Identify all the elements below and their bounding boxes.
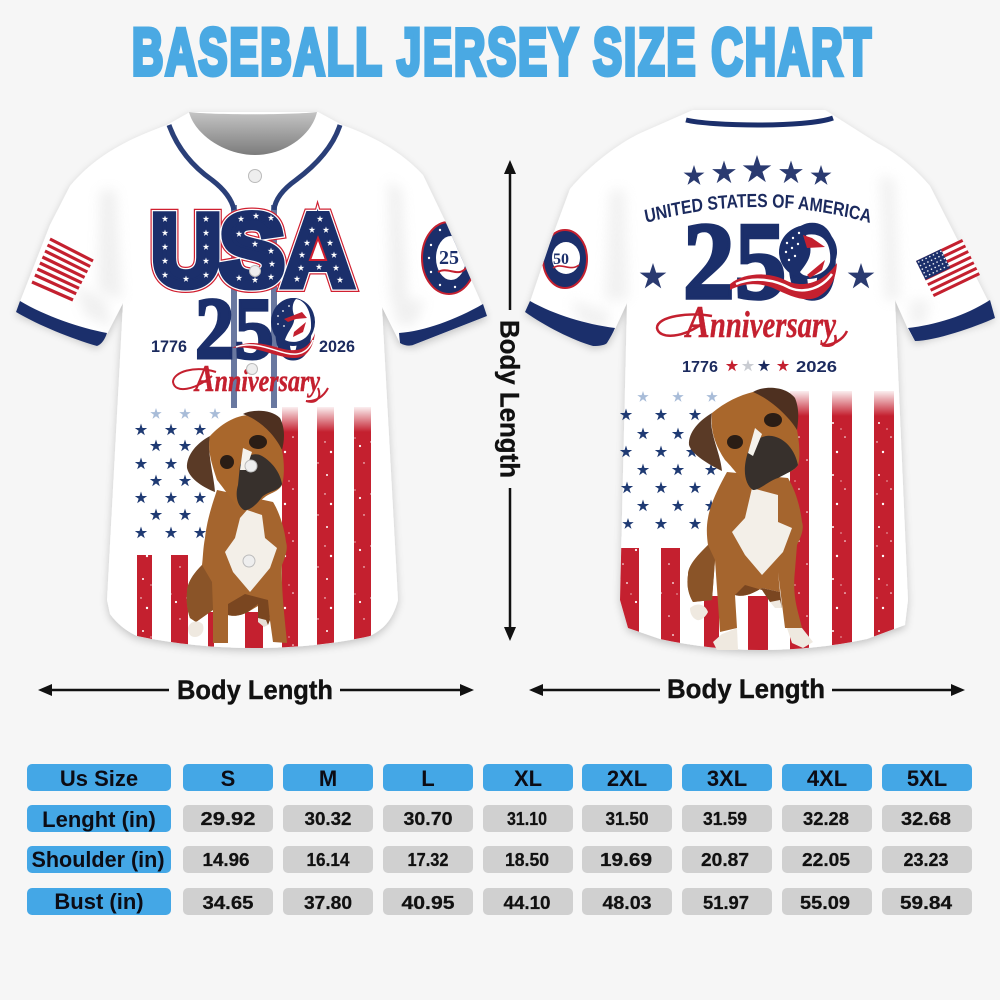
years row back: 1776 [682,359,718,376]
length row: 31.59 [703,809,747,829]
USA lettering: USA [152,194,352,306]
shoulder row: 20.87 [701,850,749,870]
star field front [135,408,221,538]
bust row: Bust (in) [54,889,144,914]
side stars back [640,263,874,288]
bust row: 40.95 [402,893,454,913]
years row back: 2026 [796,359,837,376]
shoulder row: 22.05 [802,850,850,870]
fabric shading back [578,182,926,326]
jersey body front [16,112,487,648]
length row: 30.70 [404,809,452,829]
USA lettering: USA [152,194,352,306]
length row: 31.10 [507,809,547,829]
USA lettering: USA [152,194,352,306]
inner collar [189,112,317,155]
dog photo front [187,411,287,643]
curved title back: UNITED STATES OF AMERICA [644,194,870,223]
left cuff [16,301,107,346]
header row: XL [514,766,542,791]
years row back [682,359,837,376]
header row: L [421,766,435,791]
front jersey [16,112,487,652]
right cuff [399,304,487,346]
horizontal arrow back [529,674,965,704]
year 2026 front: 2026 [319,337,355,356]
bust row: 48.03 [602,893,652,913]
left sleeve patch back [543,230,587,288]
header row: M [319,766,337,791]
placket lines [234,205,274,408]
bust row: 34.65 [202,893,254,913]
bust row [27,888,972,915]
shoulder row: 18.50 [505,850,549,870]
vertical measure arrow [494,160,524,641]
year 1776 front: 1776 [151,337,187,356]
length row: 32.68 [901,809,951,829]
shoulder row: 23.23 [904,850,948,870]
star field back [620,391,718,529]
jersey body back [525,110,993,650]
length row: 32.28 [803,809,849,829]
collar piping [169,125,340,210]
header row: S [221,766,235,791]
250 logo front: 250 [195,281,313,378]
shoulder row: 19.69 [600,850,652,870]
bust row: 51.97 [703,893,749,913]
header row: 2XL [607,766,647,791]
shoulder row: 17.32 [408,850,448,870]
flag stripes front [137,407,371,652]
anniversary script back: Anniversary [684,296,836,347]
right sleeve patch [422,222,476,294]
horizontal arrow back: Body Length [667,674,825,704]
stars arc back [684,155,831,185]
length row: 29.92 [200,809,256,829]
anniversary script front: Anniversary [193,358,320,400]
dog photo back [687,388,813,650]
flag stripes back [620,391,894,656]
length row: 30.32 [304,809,352,829]
250 logo back: 250 [683,200,838,322]
header row: 5XL [907,766,947,791]
right cuff back [908,300,995,341]
header row [27,764,972,791]
length row [27,805,972,832]
buttons front [243,170,262,567]
shoulder row: 16.14 [306,850,350,870]
right sleeve patch: 25 [439,247,459,269]
length row: 31.50 [606,809,648,829]
bust row: 55.09 [800,893,850,913]
left cuff back [525,301,615,346]
length row: Lenght (in) [42,807,156,832]
shoulder row: Shoulder (in) [32,847,164,872]
horizontal arrow front [38,675,474,705]
bust row: 37.80 [304,893,352,913]
header row: Us Size [60,766,138,791]
header row: 4XL [807,766,847,791]
horizontal arrow front: Body Length [177,675,333,705]
back jersey [524,110,996,656]
bust row: 44.10 [504,893,550,913]
shoulder row: 14.96 [202,850,250,870]
bust row: 59.84 [900,893,952,913]
header row: 3XL [707,766,747,791]
left sleeve flag [32,239,93,300]
left sleeve patch back: 50 [553,251,569,268]
fabric shading front [81,188,420,324]
vertical measure arrow: Body Length [494,320,524,478]
collar band back [686,118,833,125]
size table [27,764,972,915]
american flag back sleeve [916,239,980,297]
shoulder row [27,846,972,873]
